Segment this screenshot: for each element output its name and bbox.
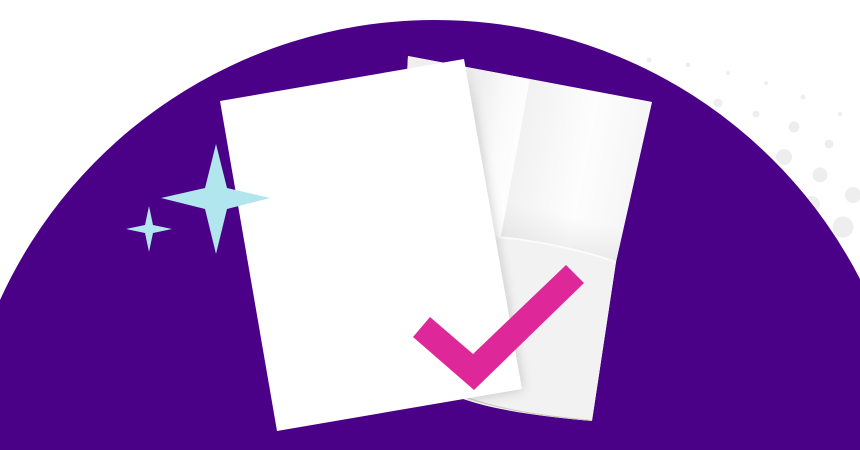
lower panel xyxy=(460,236,617,421)
bottom edge line xyxy=(468,398,592,420)
background dots xyxy=(646,58,860,238)
front white paper xyxy=(220,59,522,431)
shadow from front sheet xyxy=(460,59,522,400)
pink checkmark xyxy=(413,265,584,390)
upper panel fold shading xyxy=(501,228,618,260)
lower panel top edge highlight xyxy=(498,237,616,262)
small sparkle xyxy=(126,206,172,252)
paper upper right panel xyxy=(501,79,652,262)
large sparkle xyxy=(161,144,270,254)
paper upper left panel xyxy=(407,56,530,236)
back folded paper xyxy=(400,50,652,421)
